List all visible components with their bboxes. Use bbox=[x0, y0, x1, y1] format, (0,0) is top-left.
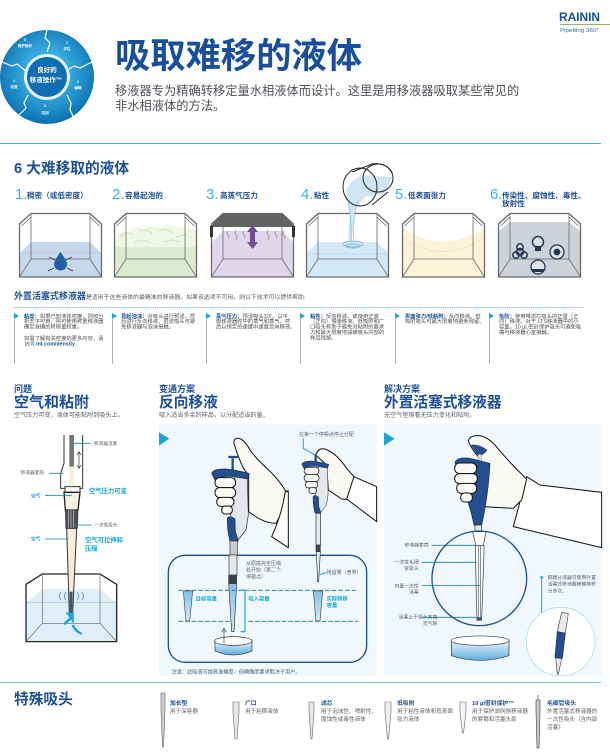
pipette labels: 空气可拉伸和 bbox=[85, 535, 123, 544]
tip column 6: hazard bbox=[489, 312, 582, 364]
tip column 1: density: mt.com/density bbox=[36, 342, 75, 348]
icon: good pipetting practice wheel: 编辑 bbox=[74, 85, 82, 90]
liquid 1 label bbox=[15, 186, 88, 203]
icon: good pipetting practice wheel: 4 bbox=[13, 79, 15, 83]
tank 4: viscous liquid with pouring beaker bbox=[306, 214, 388, 277]
logo: Rainin: Pipetting 360° bbox=[560, 28, 599, 34]
wave marks bbox=[59, 592, 83, 600]
tip column 4: viscosity: （正向）慢速移液。低吸附和广 bbox=[310, 317, 384, 325]
liquid 2 label: 容易起泡的 bbox=[125, 190, 163, 200]
heading: workaround: 反向移液 bbox=[159, 393, 218, 411]
special tip: wide orifice bbox=[233, 699, 279, 739]
liquid 6 label: 6. bbox=[490, 186, 503, 203]
liquid 6 label: 放射性 bbox=[502, 198, 525, 208]
lab coat bbox=[513, 477, 602, 548]
tip column 1: density: 如果已知液体密度，则按分 bbox=[40, 312, 104, 320]
marker triangle bbox=[384, 432, 395, 446]
panel annotations: 吸入容量 bbox=[248, 594, 270, 602]
pipette labels: 空气 bbox=[31, 536, 41, 542]
panel annotations: 停顿点） bbox=[246, 573, 266, 580]
logo: Rainin bbox=[559, 12, 610, 34]
callout: repeater inset: 活塞式移液器精确地移 bbox=[548, 581, 596, 588]
special tip: capillary bbox=[536, 695, 598, 748]
liquid 6 label: 传染性、腐蚀性、毒性、 bbox=[502, 190, 586, 200]
aspirated volume bracket bbox=[241, 590, 245, 632]
special tip: filter bbox=[309, 699, 377, 739]
water tank bbox=[26, 574, 117, 642]
rounded detail frame bbox=[168, 555, 367, 662]
tank 6: hazardous liquids bbox=[498, 214, 580, 277]
tip column 6: hazard: 危险： bbox=[499, 312, 515, 320]
tank 2: foaming liquid bbox=[114, 214, 196, 277]
icon: corrosive bbox=[531, 260, 545, 274]
heading: problem bbox=[14, 383, 124, 419]
tip column 4: viscosity: 样品残留。 bbox=[310, 334, 336, 342]
tip labels: 移液器套筒 bbox=[405, 542, 429, 549]
pipette shaft and tip bbox=[61, 435, 83, 612]
tip column 3: vapour pressure: 预浸吸头3次，以平 bbox=[242, 312, 289, 320]
heading: problem: 空气压力可变，液体可能粘附到吸头上。 bbox=[14, 411, 124, 419]
panel annotations: 残留量（舍弃） bbox=[327, 569, 362, 576]
icon: pouring beaker bbox=[343, 164, 393, 242]
liquid 4 label: 粘性 bbox=[314, 190, 330, 200]
special tip: capillary: 毛细管吸头 bbox=[547, 699, 576, 707]
panel: reverse pipetting bbox=[159, 424, 377, 676]
tip column 3: vapour pressure bbox=[206, 312, 295, 364]
callout: repeater inset bbox=[526, 574, 596, 676]
icon: good pipetting practice wheel: 5 bbox=[24, 38, 26, 42]
magnified tip circle bbox=[432, 525, 527, 626]
special tip: 10 microlitre sealed: 的套筒和活塞头部 bbox=[472, 715, 517, 723]
tip column 1: density: 确定准确的转移量权重。 bbox=[24, 322, 82, 330]
tip column 3: vapour pressure: 衡移液器腔中的蒸气和蒸气，然 bbox=[216, 317, 291, 325]
tip column 5: surface tension bbox=[395, 312, 484, 364]
panel annotations: 处开始（第二个 bbox=[246, 567, 281, 574]
liquid 5 label: 低表面张力 bbox=[408, 190, 446, 200]
tip column 5: surface tension: 表面张力/低粘附： bbox=[405, 312, 449, 320]
tip column 5: surface tension: 吸附吸头可最大限度地避免残留。 bbox=[405, 317, 484, 325]
icon: good pipetting practice wheel: 2 bbox=[77, 80, 79, 84]
intro text: 非水相液体的方法。 bbox=[115, 98, 225, 113]
heading: workaround: 吸入适当多余的样品，以分配适当的量。 bbox=[159, 411, 269, 419]
heading: solution: 外置活塞式移液器 bbox=[384, 393, 502, 411]
tip labels: 活塞止于吸头末端 bbox=[399, 613, 437, 620]
heading: problem: 问题 bbox=[14, 383, 32, 394]
panel annotations: 注意：此吸液可提高准确度，但精确度要求取决于用户。 bbox=[172, 667, 301, 675]
icon: good pipetting practice wheel: 1 bbox=[66, 41, 68, 45]
special tip: wide orifice: 用于粘稠液体 bbox=[245, 707, 279, 715]
target volume tip bbox=[183, 591, 193, 621]
icon: radiation bbox=[550, 245, 564, 259]
tip column 1: density: 析天平可用，则可使用称重移液器 bbox=[24, 317, 104, 325]
liquid 2 label: 2. bbox=[112, 186, 125, 203]
actual volume tip bbox=[313, 591, 323, 621]
heading: problem: 空气和粘附 bbox=[14, 393, 89, 411]
hand with pipette, aspirate bbox=[212, 438, 289, 632]
tip column 4: viscosity: 口吸头有助于避免对粘附的要求 bbox=[310, 322, 385, 330]
heading: solution bbox=[384, 383, 502, 419]
tip labels: 管吸头 bbox=[404, 565, 419, 572]
special tip: capillary: 一次性吸头（含内部 bbox=[547, 715, 598, 723]
icon: gas mask bbox=[532, 236, 544, 251]
panel: positive displacement pipette bbox=[384, 424, 602, 677]
hand and pipette bbox=[455, 436, 527, 525]
liquid 4 label bbox=[301, 186, 330, 203]
special tip: extended: 用于深容器 bbox=[170, 707, 198, 715]
diagram: air displacement pipette bbox=[21, 435, 128, 642]
liquid 5 label: 5. bbox=[395, 186, 408, 203]
arrows: liquid flow bbox=[64, 614, 82, 634]
pipette labels: 一次性吸头 bbox=[94, 522, 118, 529]
tip column 1: density: 访问 bbox=[24, 340, 36, 348]
tip labels bbox=[395, 542, 480, 627]
icon: good pipetting practice wheel: 维护操作 bbox=[18, 43, 33, 48]
icon: good pipetting practice wheel: 良好的 bbox=[37, 65, 57, 74]
liquid 3 label: 3. bbox=[206, 186, 219, 203]
pipette labels: 移液器活塞 bbox=[94, 440, 118, 447]
icon: good pipetting practice wheel: 移液操作™ bbox=[30, 75, 62, 84]
liquid 5 label bbox=[395, 186, 446, 203]
icon: good pipetting practice wheel: 3 bbox=[44, 104, 46, 108]
marker triangle bbox=[159, 432, 169, 446]
tip labels: 内置一次性 bbox=[395, 582, 419, 589]
special tip: filter: 滤芯 bbox=[321, 699, 333, 707]
special tip: filter: 用于泡沫性、喷射性、 bbox=[321, 707, 377, 715]
special tip: capillary: 外置活塞式移液器的 bbox=[547, 707, 598, 715]
intro text: 移液器专为精确转移定量水相液体而设计。这里是用移液器吸取某些常见的 bbox=[115, 83, 519, 98]
tip column 3: vapour pressure: 后以恒定的速度中速度反向移液。 bbox=[216, 322, 295, 330]
tip column 6: hazard: 嘴与移液器心室接触。 bbox=[499, 328, 552, 336]
tip column 6: hazard: 使用带滤芯吸头的正置（正 bbox=[515, 312, 579, 320]
logo: Rainin: RAININ bbox=[559, 12, 600, 24]
callout: repeater inset: 分多次。 bbox=[548, 587, 567, 594]
panel annotations: 目标容量 bbox=[196, 594, 218, 602]
beaker bbox=[215, 628, 252, 655]
panel annotations: 在第一个停顿点停止分配 bbox=[299, 431, 354, 438]
beaker bbox=[451, 636, 509, 660]
text: positive displacement intro: 外置活塞式移液器 bbox=[14, 290, 86, 301]
special tip: wide orifice: 广口 bbox=[245, 699, 257, 707]
panel annotations: 从原底完全压缩 bbox=[246, 560, 281, 567]
tip labels: 一次性毛细 bbox=[395, 558, 419, 565]
liquid 4 label: 4. bbox=[301, 186, 314, 203]
liquid 1 label: 1. bbox=[15, 186, 28, 203]
icon: good pipetting practice wheel bbox=[0, 30, 94, 124]
tip column 6: hazard: 向）移液。对于 LTS移液器中的小 bbox=[499, 317, 579, 325]
panel annotations: 实际转移 bbox=[327, 594, 349, 602]
text: positive displacement intro bbox=[14, 290, 306, 301]
pipette labels bbox=[21, 440, 128, 552]
special tip: filter: 腐蚀性或毒性液体 bbox=[321, 715, 366, 723]
tip column 2: foaming: 易起泡沫： bbox=[121, 312, 148, 320]
tip column 5: surface tension: 反向移液。低 bbox=[449, 312, 481, 320]
tip column 1: density: 如需了解有关密度的更多内容，请 bbox=[24, 334, 104, 342]
tip labels: 无气隙 bbox=[423, 620, 437, 627]
dashed volume lines bbox=[178, 590, 358, 621]
heading: special tips: 特殊吸头 bbox=[14, 690, 73, 708]
heading: solution: 解决方案 bbox=[384, 383, 420, 394]
tip column 2: foaming: 后进行反向移液。层流吸头可避 bbox=[121, 317, 196, 325]
liquid 3 label: 高蒸气压力 bbox=[220, 190, 258, 200]
tank 5: low surface tension bbox=[402, 214, 484, 277]
tip column 1: density: 粘度： bbox=[24, 312, 40, 320]
pipette labels: 压缩 bbox=[85, 543, 98, 552]
tip column 2: foaming: 对吸头进行预浸，然 bbox=[148, 312, 196, 320]
panel annotations: 容量 bbox=[327, 601, 338, 609]
pipette labels: 空气 bbox=[31, 493, 41, 499]
heading: six liquids: 6 大难移取的液体 bbox=[14, 159, 129, 177]
liquid 3 label bbox=[206, 186, 258, 203]
tip column 6: hazard: 容量，10 µL密封保护吸头可避免吸 bbox=[499, 322, 582, 330]
tip column 2: foaming bbox=[112, 312, 196, 364]
tip column 2: foaming: 免移液器与泡沫接触。 bbox=[121, 322, 174, 330]
special tip: 10 microlitre sealed bbox=[460, 699, 528, 733]
icon: good pipetting practice wheel: 培训 bbox=[41, 110, 49, 115]
tip column 4: viscosity: 粘性： bbox=[310, 312, 326, 320]
tank 1: dense liquid bbox=[20, 214, 102, 277]
icon: good pipetting practice wheel: 评估 bbox=[63, 46, 71, 51]
special tip: capillary: 活塞） bbox=[547, 723, 564, 731]
icon: good pipetting practice wheel: 校准 bbox=[10, 84, 18, 89]
liquid 6 label bbox=[490, 186, 586, 208]
tip column 4: viscosity bbox=[300, 312, 385, 364]
tip labels: 活塞 bbox=[409, 588, 419, 595]
special tip: extended bbox=[161, 693, 198, 747]
special tip: low retention: 用于粘性液体和低表面 bbox=[397, 707, 453, 715]
special tip: 10 microlitre sealed: 10 µl密封保护™ bbox=[472, 699, 514, 707]
icon: biohazard bbox=[513, 244, 527, 258]
special tip: low retention: 低吸附 bbox=[397, 699, 415, 707]
special tip: low retention: 张力液体 bbox=[397, 715, 420, 723]
heading: workaround: 变通方案 bbox=[159, 383, 195, 394]
heading: solution: 无空气垫隙看无压力变化和粘附。 bbox=[384, 411, 475, 419]
special tip: 10 microlitre sealed: 用于保护滤网侧移液器 bbox=[472, 707, 528, 715]
tip column 3: vapour pressure: 蒸气压力： bbox=[216, 312, 242, 320]
text: positive displacement intro: 是适用于这些液体的最精准的移液器。如果该选项不可用，则以下技术可以提供帮助: bbox=[86, 293, 306, 301]
callout: repeater inset: 隔膜分液器可使用外置 bbox=[548, 574, 596, 581]
title: 吸取难移的液体 bbox=[115, 37, 362, 76]
panel annotations bbox=[172, 431, 362, 675]
pipette labels: 空气压力可变 bbox=[89, 486, 128, 495]
tip column 1: density bbox=[14, 312, 104, 364]
liquid 1 label: 稠密（或低密度） bbox=[27, 190, 88, 200]
tip column 4: viscosity: 反向移液。或使用正置 bbox=[326, 312, 379, 320]
tank 3: high vapour pressure bbox=[210, 214, 295, 277]
special tip: extended: 加长型 bbox=[170, 699, 188, 707]
pipette labels: 移液器套筒 bbox=[21, 469, 44, 476]
special tip: low retention bbox=[385, 699, 453, 739]
liquid 2 label bbox=[112, 186, 163, 203]
hand with pipette, dispense bbox=[302, 449, 377, 582]
tip column 4: viscosity: 力和最大限度地减缓吸头内部的 bbox=[310, 328, 384, 336]
heading: workaround bbox=[159, 383, 269, 419]
